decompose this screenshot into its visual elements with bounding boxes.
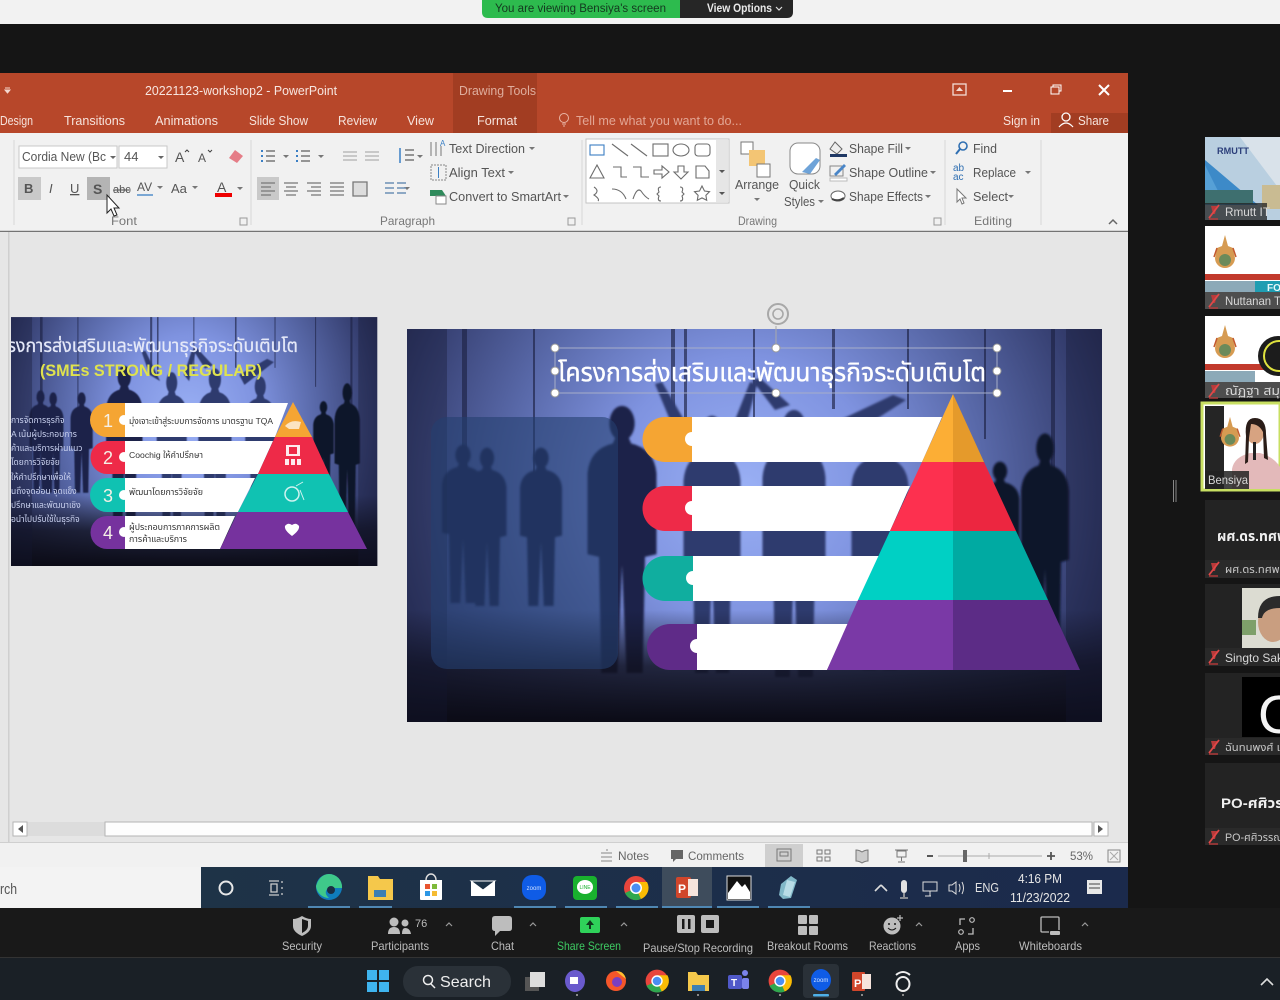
ribbon group: drawing: Shape Effects	[849, 189, 923, 204]
horizontal scrollbar	[13, 822, 1108, 836]
thumbnail side text: ค้าและบริการผ่านแนว	[11, 443, 82, 453]
ribbon group: drawing: Arrange	[735, 177, 779, 192]
zoom share banner	[0, 0, 1280, 24]
status bar: Notes	[618, 849, 649, 863]
ribbon group: editing: ab	[953, 163, 965, 174]
whiteboards: Whiteboards	[1019, 939, 1082, 953]
thumbnail side text: ให้คำปรึกษาเพื่อให้	[11, 471, 71, 482]
ribbon background	[0, 133, 1128, 232]
PowerPoint title bar and tabs: Animations	[155, 113, 218, 128]
purple bar	[647, 624, 848, 670]
zoom meeting toolbar	[0, 908, 1280, 958]
thumbnail side text: นถึงจุดอ่อน จุดแข็ง	[11, 486, 77, 496]
thumbnail pyramid	[220, 402, 367, 549]
apps	[955, 918, 980, 953]
thumbnail numbers: 4	[103, 523, 113, 543]
ribbon group: editing: Select	[973, 189, 1008, 204]
status bar: 53%	[1070, 849, 1093, 863]
pause stop recording: Pause/Stop Recording	[643, 941, 753, 955]
participant: Bensiya active speaker	[1202, 403, 1280, 490]
thumbnail side text: ปรึกษาและพัฒนาเชิง	[11, 500, 81, 510]
security: Security	[282, 939, 322, 953]
search pill	[403, 966, 511, 997]
thumbnail numbers: 3	[103, 486, 113, 506]
ribbon group: editing: Editing	[974, 214, 1012, 228]
PowerPoint title bar and tabs: Format	[477, 113, 517, 128]
ribbon group: font: I	[49, 181, 53, 196]
thumbnail side text: A เน้นผู้ประกอบการ	[11, 429, 77, 440]
thumbnail bar labels: Coochig ให้คำปรึกษา	[129, 450, 203, 460]
participant: Singto	[1205, 584, 1280, 666]
ribbon group: font	[18, 146, 247, 228]
ribbon group: drawing: Styles	[784, 194, 815, 209]
PowerPoint title bar and tabs: View	[407, 113, 435, 128]
ribbon group: font: U	[70, 181, 79, 196]
pause stop recording	[643, 915, 753, 955]
taskbar icons: zoom	[527, 886, 541, 892]
desktop taskbar inside shared screen: ENG	[975, 880, 999, 895]
slide title with selection frame: โครงการส่งเสริมและพัฒนาธุรกิจระดับเติบโต	[558, 357, 986, 388]
breakout rooms: Breakout Rooms	[767, 939, 848, 953]
thumbnail side text	[11, 415, 82, 524]
chat	[491, 916, 536, 953]
security	[282, 916, 322, 953]
ribbon group: font: B	[24, 181, 33, 196]
thumbnail bar labels	[129, 416, 273, 544]
participant: Nuttanan	[1205, 226, 1280, 309]
PowerPoint title bar and tabs: Tell me what you want to do...	[576, 113, 742, 128]
translucent text panel	[431, 417, 618, 669]
ribbon group: paragraph: Align Text	[449, 165, 505, 180]
desktop taskbar inside shared screen: 4:16 PM	[1018, 871, 1062, 886]
reactions: Reactions	[869, 939, 916, 953]
ribbon group: editing: Find	[973, 141, 997, 156]
ribbon group: paragraph: A	[440, 139, 446, 148]
teal bar	[642, 556, 879, 601]
ribbon group: paragraph: Paragraph	[380, 214, 435, 228]
status bar: Comments	[688, 849, 744, 863]
mouse cursor	[107, 195, 119, 216]
chat: Chat	[491, 939, 515, 953]
thumbnail numbers	[103, 414, 112, 539]
ribbon group: drawing: Shape Outline	[849, 165, 928, 180]
thumbnail side text: โดยการวิจัยจัย	[11, 457, 60, 467]
taskbar icons: LINE	[579, 885, 591, 891]
ribbon group: editing	[953, 141, 1117, 228]
ribbon group: editing: Replace	[973, 165, 1016, 180]
thumbnail side text: อนำไปปรับใช้ในธุรกิจ	[11, 514, 80, 524]
main slide	[407, 304, 1102, 722]
reactions	[869, 915, 922, 953]
thumbnail numbers: 2	[103, 448, 113, 468]
thumbnail heading: โครงการส่งเสริมและพัฒนาธุรกิจระดับเติบโต	[0, 334, 298, 357]
PowerPoint title bar and tabs	[0, 73, 1128, 133]
participant: Rmutt IT: RMUTT	[1217, 146, 1250, 156]
participant: Rmutt IT: Rmutt IT	[1225, 205, 1271, 219]
zoom share banner: View Options	[707, 3, 772, 15]
PowerPoint title bar and tabs: Design	[0, 113, 33, 128]
PowerPoint title bar and tabs: Drawing Tools	[459, 84, 536, 98]
ribbon group: font: Font	[111, 214, 138, 228]
PowerPoint title bar and tabs: Share	[1078, 113, 1109, 128]
participant: black thumbnail	[1205, 673, 1280, 755]
participants: Participants	[371, 939, 429, 953]
share screen: Share Screen	[557, 939, 621, 953]
participant: Nattha	[1205, 316, 1280, 398]
zoom share banner: You are viewing Bensiya's screen	[495, 3, 666, 15]
ribbon group: font: Aa	[171, 181, 188, 196]
thumbnail icons	[285, 421, 304, 536]
participants	[371, 918, 452, 953]
windows taskbar	[0, 958, 1280, 1000]
ribbon group: drawing: Drawing	[738, 214, 777, 228]
ribbon group: font: S	[93, 181, 102, 197]
thumbnail bar labels: การค้าและบริการ	[129, 534, 187, 544]
ribbon group: drawing: Shape Fill	[849, 141, 903, 156]
PowerPoint title bar and tabs: Sign in	[1003, 113, 1040, 128]
thumbnail side text: การจัดการธุรกิจ	[11, 415, 65, 425]
pinned apps	[525, 964, 910, 998]
participant: Nattha: ณัฏฐา สมุ	[1225, 384, 1280, 398]
thumbnail bars	[90, 403, 288, 549]
thumbnail bar labels: มุ่งเจาะเข้าสู่ระบบการจัดการ มาตรฐาน TQA	[129, 416, 273, 427]
ribbon group: drawing: Quick	[789, 177, 820, 192]
ribbon group: paragraph	[257, 139, 575, 228]
ribbon group: font: abc	[113, 184, 131, 196]
desktop taskbar inside shared screen	[0, 867, 1128, 908]
participant: black thumbnail: ฉันทนพงศ์ แ	[1225, 742, 1280, 754]
share screen	[557, 917, 627, 953]
ribbon group: font: A	[217, 179, 227, 195]
desktop taskbar inside shared screen: rch	[0, 881, 17, 898]
PowerPoint title bar and tabs: Review	[338, 113, 378, 128]
thumbnail subheading: (SMEs STRONG / REGULAR)	[40, 361, 262, 380]
ribbon group: drawing	[586, 139, 941, 228]
taskbar icons	[220, 867, 1102, 908]
PowerPoint title bar and tabs: Slide Show	[249, 113, 309, 128]
PowerPoint title bar and tabs: Transitions	[64, 113, 125, 128]
slide workspace	[0, 232, 1128, 843]
thumbnail slide	[0, 317, 377, 566]
red bar	[642, 486, 910, 531]
ribbon group: font: AV	[137, 180, 152, 194]
thumbnail bar labels: ผู้ประกอบการภาคการผลิต	[129, 522, 220, 533]
participant: PO: PO-ศศิวร	[1221, 795, 1280, 811]
whiteboards	[1019, 917, 1088, 953]
apps: Apps	[955, 939, 980, 953]
slide title with selection frame	[551, 304, 1001, 397]
ribbon group: paragraph: Text Direction	[449, 141, 525, 156]
participant: Rmutt IT	[1205, 137, 1280, 220]
pinned apps: P	[854, 978, 861, 990]
participants: 76	[415, 918, 427, 930]
thumbnail numbers: 1	[103, 411, 113, 431]
breakout rooms	[767, 915, 848, 953]
windows logo	[367, 970, 389, 992]
ribbon group: font: A	[198, 151, 206, 165]
taskbar icons: P	[678, 882, 686, 896]
pyramid	[827, 394, 1080, 670]
ribbon group: editing: ac	[953, 172, 964, 183]
pinned apps: T	[731, 978, 737, 989]
participant: assistant professor	[1205, 500, 1280, 578]
pinned apps: zoom	[814, 978, 828, 984]
search pill: Search	[440, 974, 491, 991]
ribbon group: paragraph: Convert to SmartArt	[449, 189, 561, 204]
ribbon group: font: Cordia New (Bc	[22, 149, 106, 164]
ribbon group: font: A	[175, 149, 185, 165]
desktop taskbar inside shared screen: 11/23/2022	[1010, 890, 1070, 905]
status bar	[0, 842, 1128, 867]
ribbon group: font: 44	[124, 149, 138, 164]
panel splitter	[1174, 480, 1176, 502]
underlines for open apps	[308, 906, 810, 908]
PowerPoint title bar and tabs: 20221123-workshop2 - PowerPoint	[145, 83, 337, 98]
orange bar	[642, 417, 942, 462]
participant: Bensiya active speaker: Bensiya	[1208, 473, 1248, 487]
participant: PO	[1205, 763, 1280, 845]
thumbnail bar labels: พัฒนาโดยการวิจัยจัย	[129, 487, 203, 497]
